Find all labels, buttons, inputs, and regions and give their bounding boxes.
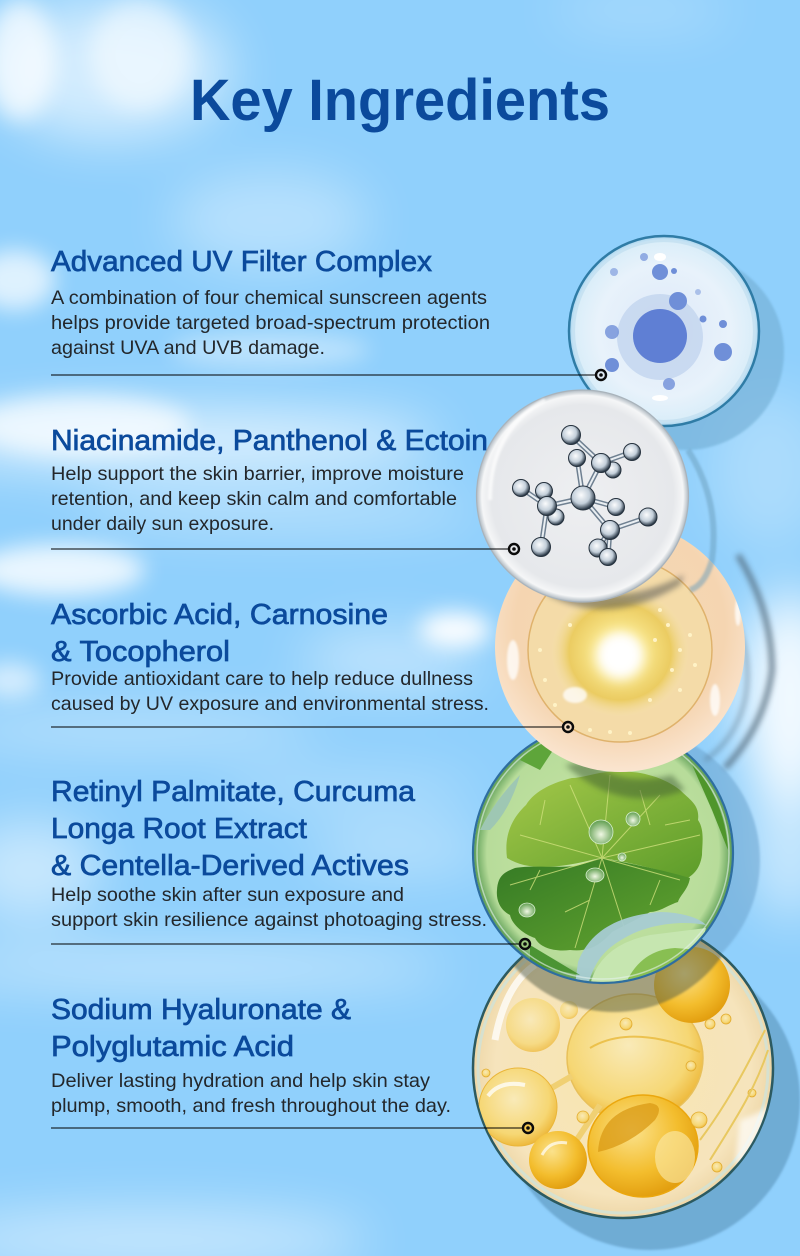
ingredient 4 [51, 776, 530, 949]
description: Provide antioxidant care to help reduce dullness [51, 668, 473, 690]
description [51, 884, 487, 931]
heading [51, 599, 388, 668]
heading: & Tocopherol [51, 636, 230, 668]
inner liquid pool [528, 558, 712, 742]
heading [51, 994, 351, 1063]
bubble: pale upper left [506, 998, 560, 1052]
dish shadow: blue cell dish [588, 254, 784, 450]
shadow of green dish [514, 941, 722, 1014]
cell body [617, 294, 703, 380]
floating blue particles [605, 253, 732, 390]
cell nucleus [633, 309, 687, 363]
green shadow cast by peach dish [565, 760, 685, 798]
leader line with marker [51, 939, 530, 949]
bubble: small bottom [529, 1131, 587, 1189]
dish: centella green leaf [473, 723, 733, 985]
tiny bubbles [482, 1014, 756, 1172]
green leaf lower half [497, 858, 690, 950]
soft highlights [507, 598, 741, 716]
water droplets [519, 812, 640, 917]
description: caused by UV exposure and environmental stress. [51, 693, 489, 715]
dish: hyaluronate yellow bubbles [472, 938, 774, 1220]
water swoosh [575, 912, 706, 985]
ingredient 5 [51, 994, 533, 1133]
description: under daily sun exposure. [51, 513, 274, 535]
ingredient 1 [51, 246, 606, 380]
description [51, 1070, 451, 1117]
dish: clear molecule [476, 390, 688, 602]
description: A combination of four chemical sunscreen agents [51, 287, 487, 309]
description: plump, smooth, and fresh throughout the day. [51, 1095, 451, 1117]
description [51, 463, 464, 535]
dish shadow: yellow dish [500, 950, 800, 1250]
dish shadow: green dish [494, 727, 760, 993]
heading: & Centella-Derived Actives [51, 850, 409, 882]
green leaf upper half [506, 772, 703, 878]
heading: Advanced UV Filter Complex [51, 246, 432, 278]
description: helps provide targeted broad-spectrum protection [51, 312, 490, 334]
leader line with marker [51, 370, 606, 380]
molecule structure [512, 426, 657, 566]
ingredient 3 [51, 599, 573, 732]
description [51, 668, 489, 715]
golden sparkles [538, 608, 697, 735]
description: Help soothe skin after sun exposure and [51, 884, 404, 906]
dish: blue cell [569, 236, 759, 426]
leader line with marker [51, 544, 519, 554]
dish: vitamin C peach with sun [495, 522, 745, 772]
leaf veins [510, 775, 700, 948]
heading: Polyglutamic Acid [51, 1031, 294, 1063]
description: retention, and keep skin calm and comfortable [51, 488, 457, 510]
leader line with marker [51, 1123, 533, 1133]
description [51, 287, 490, 359]
description: support skin resilience against photoaging stress. [51, 909, 487, 931]
yellow glow with sun [557, 594, 684, 712]
lens shadow: clear molecule dish [688, 450, 714, 590]
heading: Sodium Hyaluronate & [51, 994, 351, 1026]
heading: Ascorbic Acid, Carnosine [51, 599, 388, 631]
shadow of clear lens [548, 575, 684, 609]
description: Help support the skin barrier, improve moisture [51, 463, 464, 485]
heading: Longa Root Extract [51, 813, 307, 845]
description: against UVA and UVB damage. [51, 337, 325, 359]
bubble: large front gold [588, 1095, 698, 1197]
bubble: top right [654, 947, 730, 1023]
bubble: large centre [567, 994, 703, 1122]
connector stick [548, 1076, 600, 1150]
arc shadows right of peach dish [705, 555, 772, 768]
description: Deliver lasting hydration and help skin stay [51, 1070, 430, 1092]
leader line with marker [51, 722, 573, 732]
heading: Retinyl Palmitate, Curcuma [51, 776, 415, 808]
title: Key Ingredients [190, 68, 610, 133]
bubble: left [479, 1068, 557, 1146]
heading: Niacinamide, Panthenol & Ectoin [51, 425, 488, 457]
ingredient 2 [51, 425, 519, 554]
heading [51, 776, 415, 882]
